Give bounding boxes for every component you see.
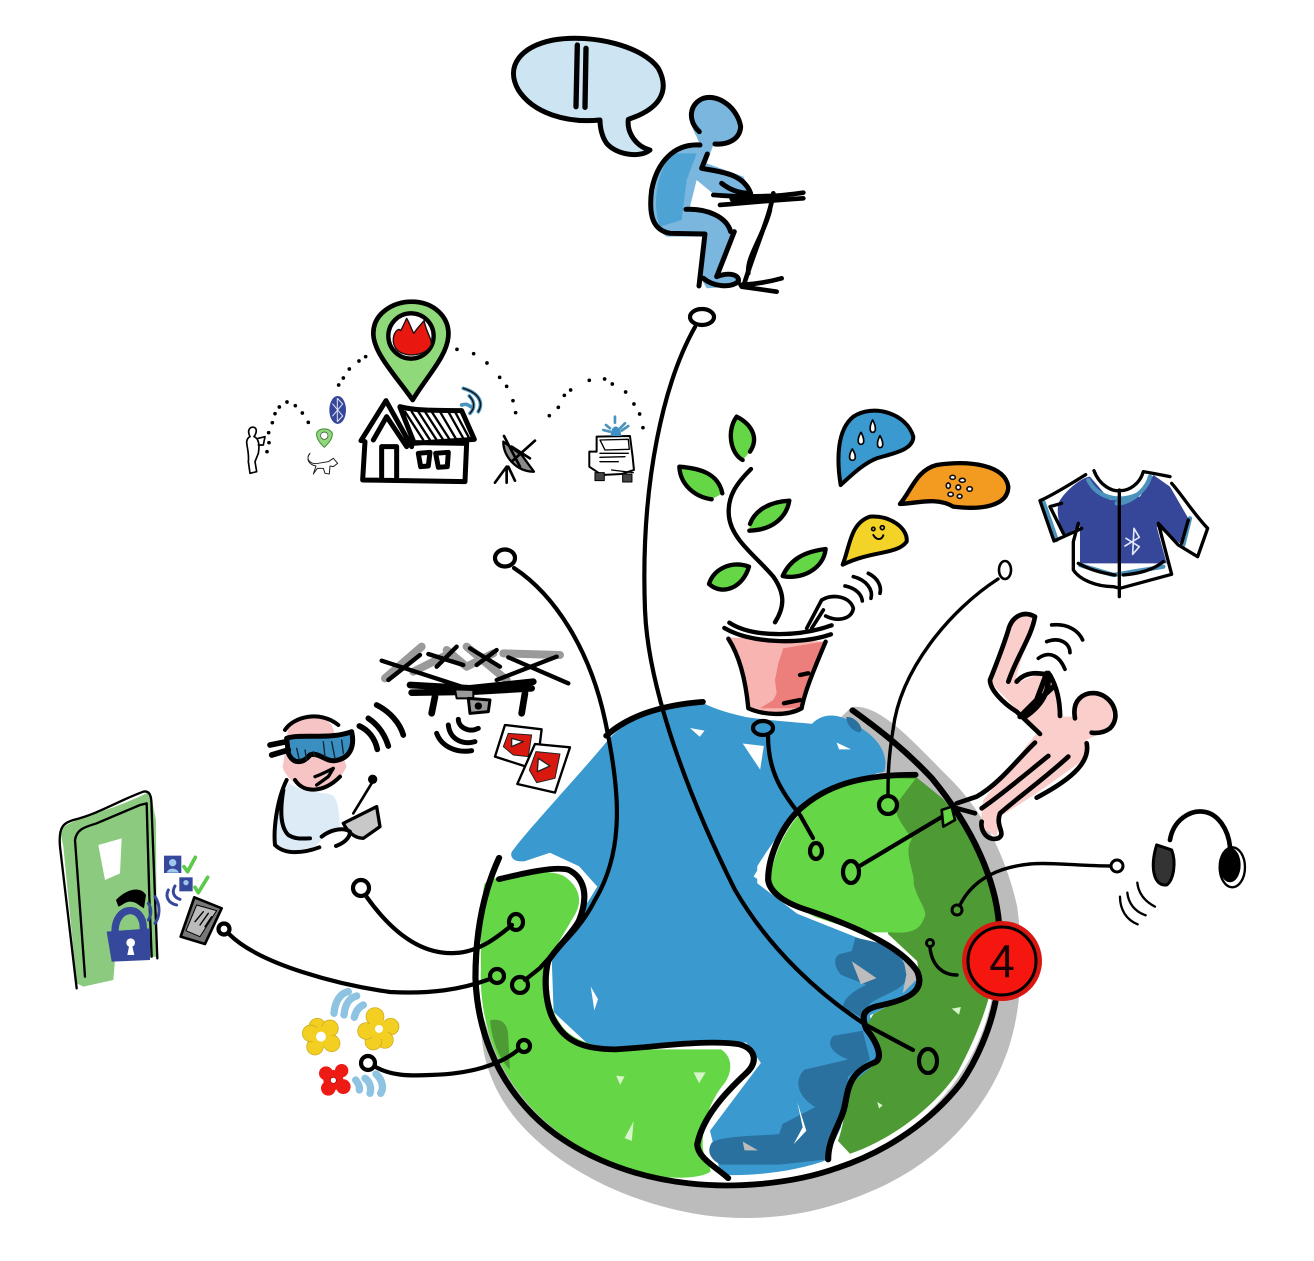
shirt outline [1040,471,1208,597]
smart door lock [60,791,222,988]
globe [475,702,1021,1218]
wifi waves [462,388,480,413]
left coastline [499,869,754,1178]
bluetooth shirt, wearable body and headphones [942,471,1245,924]
smart home fire alert scene [247,302,645,483]
globe white disc [475,736,995,1187]
globe top arc [606,702,703,736]
pot outline [724,623,832,714]
top seated figure with speech bubble [513,38,803,292]
figure torso shade [656,153,697,227]
line to body [858,815,945,867]
house windows [418,452,448,467]
phone [181,897,222,944]
left ear cup [1153,845,1174,885]
speech bubble pause mark [576,45,586,107]
line to plant pot [768,735,813,838]
wrist signal arcs [1038,625,1083,669]
numbered red badge [962,921,1042,1001]
door outline [60,791,157,988]
shirt bluetooth symbol [1125,528,1139,554]
figure outline [651,97,751,286]
satellite dish [503,442,534,472]
wifi arcs from user [359,705,403,749]
remote control [343,807,380,838]
line to visor user [366,896,512,953]
drone and visor user [270,647,570,852]
video cards [495,725,570,793]
body outline [957,614,1115,839]
line to flowers [374,1050,518,1075]
white continent flecks [616,1007,961,1141]
fire truck siren [611,426,621,436]
flame [393,318,431,355]
user shirt [275,783,340,852]
user mouth [315,768,333,785]
person [247,427,265,473]
seeds bubble [900,463,1008,508]
padlock [115,911,143,932]
figure fill [651,97,752,288]
door window [98,838,122,880]
small pin [317,429,332,447]
yellow flower left [302,1018,340,1055]
pot shade [760,642,823,708]
visor goggles [287,732,353,762]
leaves [679,417,826,590]
user hand [322,829,350,846]
bluetooth badge [329,396,346,424]
sound arcs [1120,883,1155,924]
globe shadow [481,707,1021,1218]
drone propellers grey [385,647,560,680]
dog [308,453,338,474]
desk [713,193,803,292]
shirt trim [1043,477,1190,575]
drone legs [432,693,525,713]
connector rings [218,309,1123,1073]
fire truck [589,436,634,475]
line to top figure [644,327,913,1050]
head and shoulder outline [275,716,340,852]
blue wireless arcs bottom [356,1074,382,1093]
smart flowers [302,992,399,1096]
yellow flower right [358,1008,399,1050]
line to red badge [930,948,957,975]
grey highlights [743,954,918,1150]
body fill [980,616,1113,837]
user head [283,716,347,791]
wifi arcs below drone [437,719,478,751]
fire truck wheels [595,473,604,481]
line to drone [514,568,617,980]
wrist band [1020,673,1053,717]
ankle sensor [942,807,955,827]
ocean shadow [709,717,907,1165]
drone body [410,682,533,693]
headphones [1170,811,1230,847]
pin inner circle [388,313,434,359]
door [60,792,157,987]
white ocean flecks [591,728,851,1144]
smiley bubble [843,517,907,565]
house [361,401,474,482]
red flower [319,1064,351,1096]
pot [727,637,825,714]
water bubble [838,411,913,485]
line to shirt [888,579,998,795]
sensor probe [807,597,853,628]
plant with sensor speech bubbles [679,411,1008,714]
seed dots [946,475,972,498]
roof hatching [405,412,469,440]
door handle [116,890,146,908]
plant stem [729,469,782,622]
line to phone [229,934,490,992]
ocean [511,703,921,1175]
speech bubble [513,38,663,155]
smiley face [872,526,884,539]
line to headphones [960,863,1110,905]
right ear cup [1220,847,1245,887]
drone propellers black [382,647,568,688]
right continent dark [838,775,997,1154]
shirt fill [1058,475,1188,563]
globe outline [475,710,999,1185]
water drops [850,420,883,460]
profile badges with checks [164,856,181,873]
right continent light [770,778,925,933]
map pin [373,302,448,400]
right coastline [768,775,919,1160]
connector lines [218,309,1123,1075]
blue wireless arcs top [334,992,363,1017]
dotted arcs [265,347,645,453]
left continent dark patch [490,1020,510,1070]
badge number: 4 [989,935,1015,987]
sensor signal arcs [845,573,880,601]
lock signal arcs [148,886,180,923]
left continent [481,872,730,1178]
